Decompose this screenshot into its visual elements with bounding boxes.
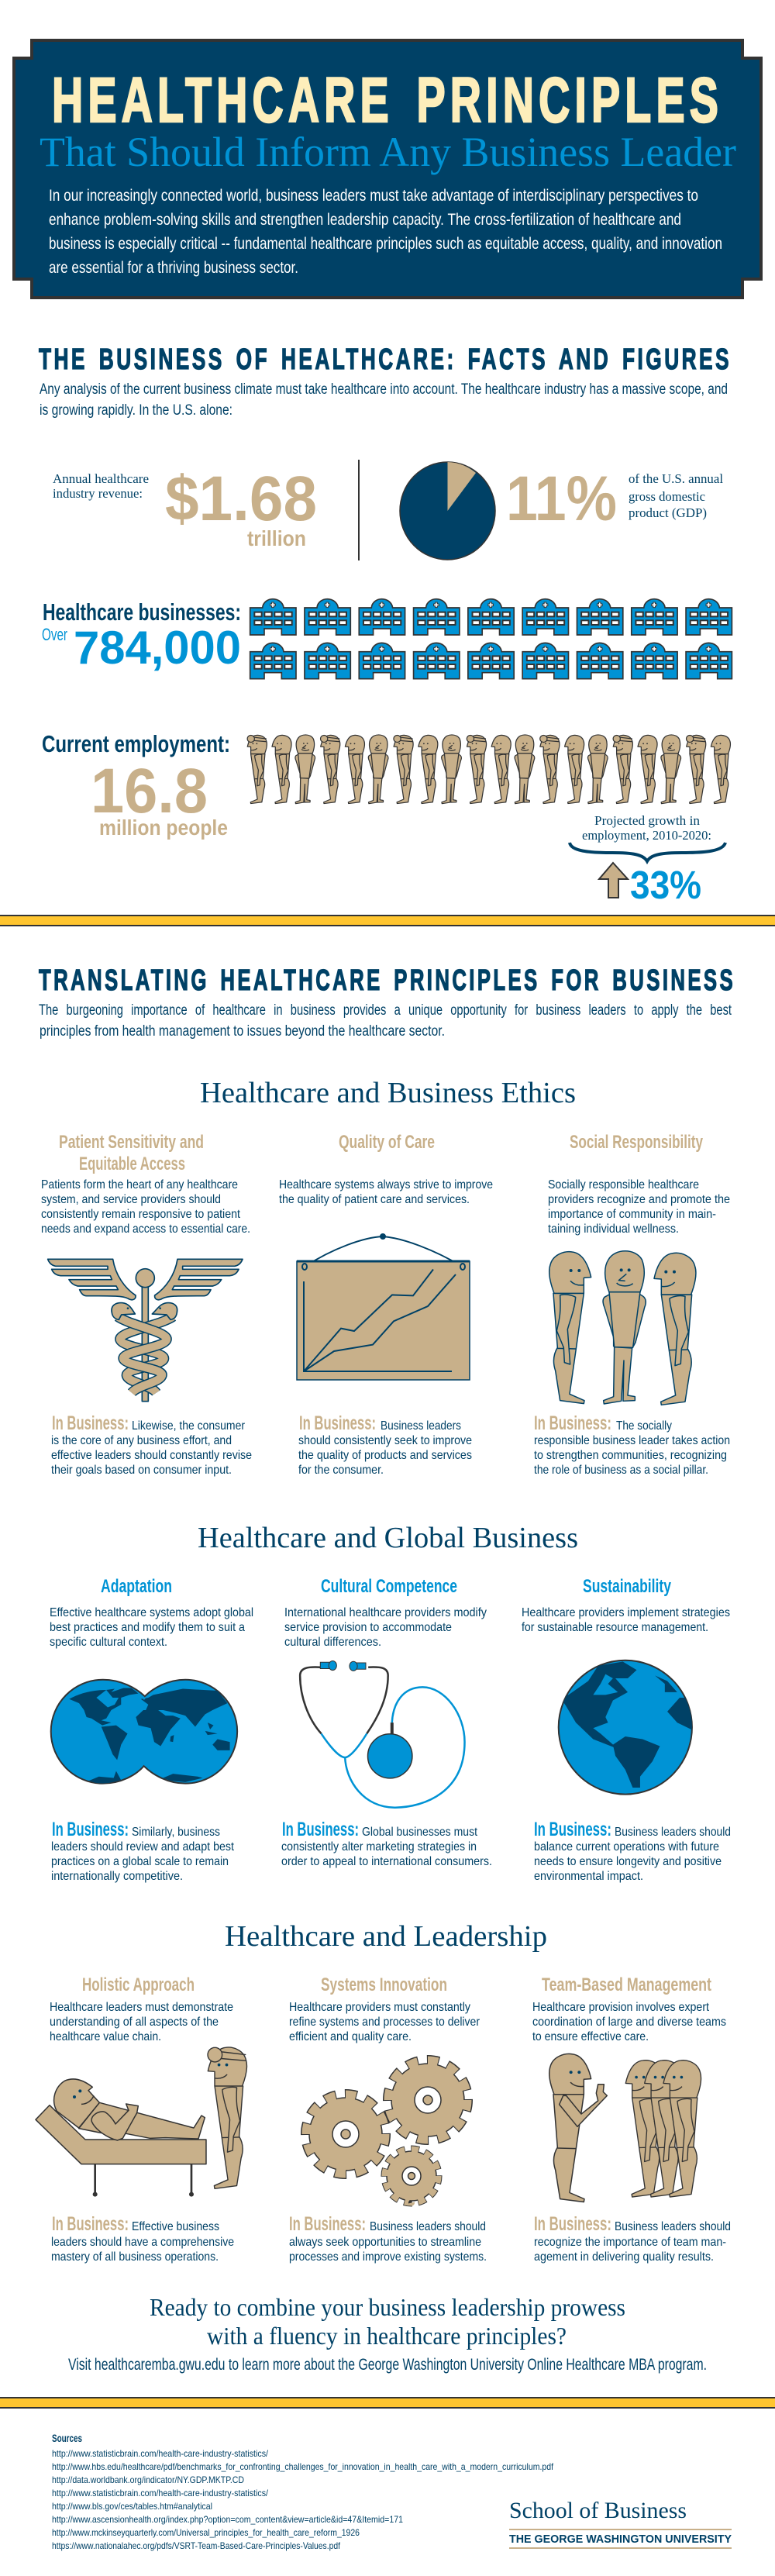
column: social responsibility: responsible business leader takes action — [534, 1434, 730, 1447]
translating intro text — [39, 1002, 732, 1040]
icon: framed line chart — [297, 1234, 470, 1380]
sources list: http://www.statisticbrain.com/health-care-industry-statistics/ — [52, 2488, 269, 2498]
column: systems innovation: Systems Innovation — [321, 1974, 447, 1995]
stat: share of GDP — [506, 464, 723, 534]
column: team-based management: coordination of large and diverse teams — [532, 2016, 726, 2029]
column: holistic approach: Holistic Approach — [82, 1974, 195, 1995]
facts intro text: is growing rapidly. In the U.S. alone: — [40, 402, 232, 419]
section heading: Healthcare and Global Business — [198, 1522, 578, 1554]
column: holistic approach — [36, 1974, 247, 2264]
stat: annual revenue — [53, 464, 317, 550]
column: team-based management: agement in delivering quality results. — [534, 2250, 714, 2264]
column: quality of care — [279, 1132, 493, 1477]
stat: current employment: 16.8 — [91, 756, 208, 826]
column: systems innovation: In Business: — [289, 2213, 366, 2235]
divider — [358, 460, 360, 560]
column: patient sensitivity: effective leaders should constantly revise — [51, 1449, 252, 1462]
column: patient sensitivity: In Business: — [52, 1412, 129, 1434]
stat: share of GDP: product (GDP) — [629, 505, 707, 520]
column: systems innovation: refine systems and processes to deliver — [289, 2016, 480, 2029]
column: adaptation: internationally competitive. — [51, 1870, 183, 1883]
stat: current employment: million people — [99, 816, 228, 840]
column: social responsibility: providers recognize and promote the — [548, 1193, 730, 1206]
icon: stethoscope — [300, 1660, 465, 1808]
icon: three gears — [306, 2060, 467, 2203]
logo: school of business — [509, 2498, 732, 2549]
sources list: https://www.nationalahec.org/pdfs/VSRT-Team-Based-Care-Principles-Values.pdf — [52, 2540, 341, 2551]
column: cultural competence: service provision to accommodate — [284, 1621, 452, 1634]
column: sustainability: Sustainability — [583, 1576, 671, 1597]
column: holistic approach: leaders should have a comprehensive — [51, 2236, 234, 2249]
column: adaptation: best practices and modify them to suit a — [50, 1621, 245, 1634]
column: adaptation: In Business: — [52, 1819, 129, 1840]
intro text — [49, 187, 722, 277]
call to action: Ready to combine your business leadership prowess — [150, 2293, 625, 2321]
column: holistic approach: mastery of all business operations. — [51, 2250, 219, 2264]
column: adaptation: leaders should review and adapt best — [51, 1840, 234, 1854]
stat: healthcare businesses: Over — [42, 625, 67, 644]
column: systems innovation: always seek opportunities to streamline — [289, 2236, 481, 2249]
stat: annual revenue: industry revenue: — [53, 486, 143, 501]
column: cultural competence: International healthcare providers modify — [284, 1606, 487, 1619]
stat: annual revenue: trillion — [247, 526, 306, 550]
column: social responsibility: taining individual wellness. — [548, 1222, 679, 1236]
stat: healthcare businesses — [42, 598, 241, 674]
callout: projected growth: Projected growth in — [594, 813, 700, 828]
column: social responsibility: the role of business as a social pillar. — [534, 1464, 708, 1477]
column: patient sensitivity: consistently remain responsive to patient — [41, 1208, 240, 1221]
call to action — [68, 2293, 707, 2374]
column: quality of care: for the consumer. — [298, 1464, 384, 1477]
icons: row of people — [247, 735, 730, 804]
sources list — [52, 2432, 554, 2551]
section: healthcare and leadership — [36, 1920, 731, 2264]
callout: projected growth: 33% — [630, 863, 701, 907]
column: cultural competence: cultural differences. — [284, 1636, 381, 1649]
column: social responsibility: In Business: — [534, 1412, 611, 1434]
divider band — [0, 915, 775, 926]
sources list: http://www.bls.gov/ces/tables.htm#analytical — [52, 2501, 212, 2512]
column: cultural competence: order to appeal to international consumers. — [281, 1855, 492, 1868]
call to action: with a fluency in healthcare principles? — [207, 2322, 567, 2350]
column: holistic approach: In Business: — [52, 2213, 129, 2235]
column: sustainability: needs to ensure longevity and positive — [534, 1855, 722, 1868]
column: patient sensitivity: Patient Sensitivity and — [59, 1132, 204, 1153]
column: quality of care: Quality of Care — [339, 1132, 435, 1153]
logo: school of business: THE GEORGE WASHINGTON UNIVERSITY — [509, 2533, 732, 2546]
column: sustainability — [522, 1576, 731, 1883]
facts intro text — [40, 381, 728, 419]
column: social responsibility: importance of community in main- — [548, 1208, 716, 1221]
section heading: Healthcare and Leadership — [225, 1920, 547, 1953]
column: patient sensitivity: needs and expand access to essential care. — [41, 1222, 250, 1236]
column: adaptation — [50, 1576, 253, 1883]
column: patient sensitivity: their goals based on consumer input. — [51, 1464, 232, 1477]
section: healthcare and business ethics — [41, 1077, 730, 1477]
translating intro text: principles from health management to issues beyond the healthcare sector. — [40, 1023, 445, 1040]
sources list: http://www.statisticbrain.com/health-care-industry-statistics/ — [52, 2448, 269, 2459]
column: sustainability: In Business: — [534, 1819, 611, 1840]
pie chart: 11 percent — [400, 462, 495, 560]
stat: share of GDP: 11% — [506, 464, 617, 534]
column: team-based management: Business leaders should — [615, 2220, 731, 2233]
callout: projected growth: employment, 2010-2020: — [582, 828, 711, 843]
column: systems innovation: Healthcare providers must constantly — [289, 2001, 470, 2014]
column: sustainability: balance current operations with future — [534, 1840, 719, 1854]
column: sustainability: Business leaders should — [615, 1826, 731, 1839]
footer band — [0, 2397, 775, 2409]
column: holistic approach: Effective business — [132, 2220, 219, 2233]
icons: hospital grid — [250, 599, 732, 679]
column: systems innovation — [289, 1974, 487, 2264]
column: cultural competence — [281, 1576, 492, 1868]
stat: share of GDP: of the U.S. annual — [629, 471, 723, 486]
subtitle: That Should Inform Any Business Leader — [40, 129, 736, 175]
sources list: http://data.worldbank.org/indicator/NY.GDP.MKTP.CD — [52, 2474, 244, 2485]
column: sustainability: environmental impact. — [534, 1870, 643, 1883]
sources list: Sources — [52, 2432, 82, 2444]
column: cultural competence: In Business: — [282, 1819, 359, 1840]
column: adaptation: Adaptation — [101, 1576, 172, 1597]
sources list: http://www.mckinseyquarterly.com/Universal_principles_for_health_care_reform_1926 — [52, 2527, 360, 2538]
column: patient sensitivity — [41, 1132, 252, 1477]
logo: school of business: School of Business — [509, 2498, 687, 2523]
column: team-based management: recognize the importance of team man- — [534, 2236, 726, 2249]
column: holistic approach: Healthcare leaders must demonstrate — [50, 2001, 233, 2014]
column: systems innovation: Business leaders should — [370, 2220, 486, 2233]
icon: caduceus — [48, 1259, 243, 1402]
column: cultural competence: Cultural Competence — [321, 1576, 457, 1597]
column: quality of care: the quality of products and services — [298, 1449, 472, 1462]
column: systems innovation: efficient and quality care. — [289, 2030, 412, 2043]
column: quality of care: the quality of patient care and services. — [279, 1193, 470, 1206]
icon: globe — [559, 1660, 697, 1795]
stat: annual revenue: $1.68 — [165, 464, 317, 534]
column: patient sensitivity: Patients form the heart of any healthcare — [41, 1178, 238, 1191]
icon: patient and doctor — [36, 2047, 247, 2197]
stat: annual revenue: Annual healthcare — [53, 471, 149, 486]
column: quality of care: In Business: — [299, 1412, 376, 1434]
section heading: Healthcare and Business Ethics — [200, 1077, 576, 1109]
column: cultural competence: consistently alter marketing strategies in — [281, 1840, 477, 1854]
column: adaptation: Similarly, business — [132, 1826, 220, 1839]
column: sustainability: Healthcare providers implement strategies — [522, 1606, 730, 1619]
stat: current employment — [42, 730, 230, 840]
column: adaptation: Effective healthcare systems adopt global — [50, 1606, 253, 1619]
column: social responsibility: Socially responsible healthcare — [548, 1178, 699, 1191]
column: cultural competence: Global businesses must — [362, 1826, 477, 1839]
icon: world map globes — [51, 1680, 237, 1785]
column: patient sensitivity: is the core of any business effort, and — [51, 1434, 232, 1447]
column: quality of care: Business leaders — [381, 1419, 461, 1433]
column: adaptation: practices on a global scale to remain — [51, 1855, 229, 1868]
sources list: http://www.hbs.edu/healthcare/pdf/benchmarks_for_confronting_challenges_for_innovation_in_health_care_with_a_modern_curriculum.pdf — [52, 2461, 554, 2472]
column: quality of care: should consistently seek to improve — [298, 1434, 472, 1447]
sources list: http://www.ascensionhealth.org/index.php?option=com_content&view=article&id=47&Itemid=171 — [52, 2514, 403, 2525]
column: patient sensitivity: Likewise, the consumer — [132, 1419, 246, 1433]
column: social responsibility: to strengthen communities, recognizing — [534, 1449, 727, 1462]
icon: three people — [549, 1251, 696, 1405]
stat: share of GDP: gross domestic — [629, 489, 705, 504]
icon: leader and team — [549, 2054, 701, 2202]
column: quality of care: Healthcare systems always strive to improve — [279, 1178, 493, 1191]
column: team-based management — [532, 1974, 731, 2264]
column: team-based management: Team-Based Management — [542, 1974, 711, 1995]
stat: healthcare businesses: Healthcare businesses: — [43, 598, 241, 626]
column: adaptation: specific cultural context. — [50, 1636, 167, 1649]
column: sustainability: for sustainable resource management. — [522, 1621, 708, 1634]
column: social responsibility: Social Responsibility — [570, 1132, 703, 1153]
stat: current employment: Current employment: — [42, 730, 230, 757]
column: social responsibility: The socially — [616, 1419, 672, 1433]
column: systems innovation: processes and improve existing systems. — [289, 2250, 487, 2264]
column: team-based management: In Business: — [534, 2213, 611, 2235]
column: holistic approach: understanding of all aspects of the — [50, 2016, 219, 2029]
callout: projected growth — [570, 813, 725, 907]
column: social responsibility — [534, 1132, 730, 1477]
column: patient sensitivity: Equitable Access — [79, 1154, 185, 1174]
section: healthcare and global business — [50, 1522, 731, 1883]
column: team-based management: to ensure effective care. — [532, 2030, 649, 2043]
column: team-based management: Healthcare provision involves expert — [532, 2001, 709, 2014]
column: patient sensitivity: system, and service providers should — [41, 1193, 221, 1206]
intro text: are essential for a thriving business sector. — [49, 259, 298, 277]
stat: healthcare businesses: 784,000 — [74, 622, 241, 674]
header panel — [14, 40, 761, 298]
column: holistic approach: healthcare value chain. — [50, 2030, 161, 2043]
